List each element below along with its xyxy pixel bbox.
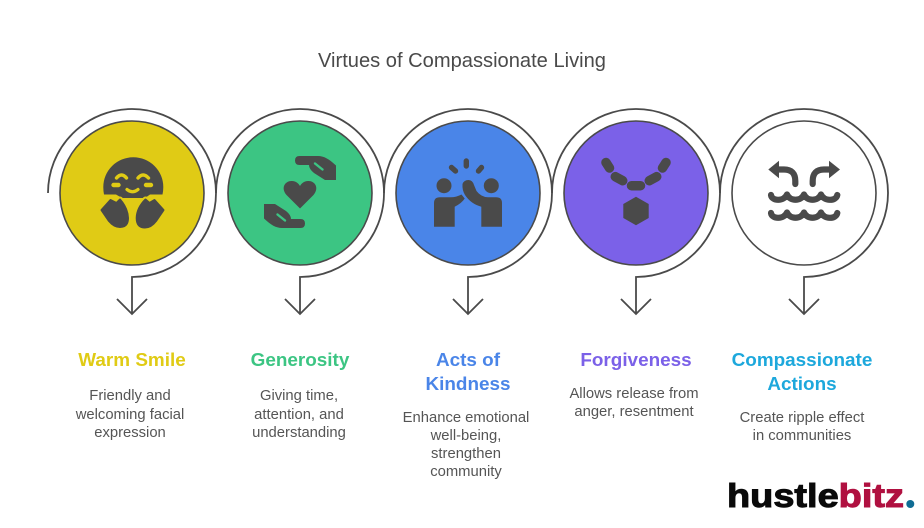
heading: acts of kindness: Acts of: [436, 350, 501, 371]
description: acts of kindness: strengthen: [431, 446, 501, 462]
icon: diverging arrows over waves: [768, 161, 840, 218]
icon part: lower hand: [264, 204, 305, 228]
ring arrow: forgiveness: [552, 109, 720, 314]
panel: forgiveness: [552, 109, 720, 314]
text: acts of kindness: [403, 350, 529, 480]
circle: generosity: [228, 121, 372, 265]
panel: acts of kindness: [384, 109, 552, 314]
description: acts of kindness: community: [430, 464, 502, 480]
ring arrow: compassionate actions: [720, 109, 888, 314]
circle: compassionate actions: [732, 121, 876, 265]
description: generosity: Giving time,: [260, 388, 338, 404]
text: generosity: [251, 350, 350, 441]
heading: forgiveness: Forgiveness: [580, 350, 692, 371]
description: compassionate actions: in communities: [753, 428, 851, 444]
description: compassionate actions: Create ripple effect: [740, 410, 864, 426]
icon part: upper hand: [295, 156, 336, 180]
heading: acts of kindness: Kindness: [425, 374, 511, 395]
panel: generosity: [216, 109, 384, 314]
ring arrow: acts of kindness: [384, 109, 552, 314]
description: generosity: understanding: [252, 425, 346, 441]
circle: acts of kindness: [396, 121, 540, 265]
description: warm smile: welcoming facial: [75, 407, 184, 423]
description: acts of kindness: Enhance emotional: [403, 410, 529, 426]
text: compassionate actions: [732, 350, 872, 444]
text: warm smile: [75, 350, 186, 441]
panel: warm smile: [48, 109, 216, 314]
icon part: heart: [284, 181, 316, 208]
description: forgiveness: anger, resentment: [574, 404, 694, 420]
heading: warm smile: Warm Smile: [78, 350, 186, 371]
heading: generosity: Generosity: [251, 350, 350, 371]
icon: high five: [434, 161, 502, 227]
circle: warm smile: [60, 121, 204, 265]
ring arrow: generosity: [216, 109, 384, 314]
icon: necklace: [606, 162, 666, 225]
heading: compassionate actions: Actions: [767, 374, 837, 395]
description: acts of kindness: well-being,: [430, 428, 501, 444]
logo: hustlebitz: hustle bitz: [727, 477, 904, 514]
description: generosity: attention, and: [254, 407, 344, 423]
description: forgiveness: Allows release from: [569, 386, 699, 402]
icon: hands and heart: [264, 156, 336, 228]
title: Virtues of Compassionate Living: [318, 50, 606, 72]
icon: smiling face with hands: [102, 157, 164, 228]
description: warm smile: Friendly and: [89, 388, 171, 404]
ring arrow: warm smile: [48, 109, 216, 314]
text: forgiveness: [569, 350, 699, 420]
panel: compassionate actions: [720, 109, 888, 314]
circle: forgiveness: [564, 121, 708, 265]
description: warm smile: expression: [94, 425, 166, 441]
heading: compassionate actions: Compassionate: [732, 350, 872, 371]
